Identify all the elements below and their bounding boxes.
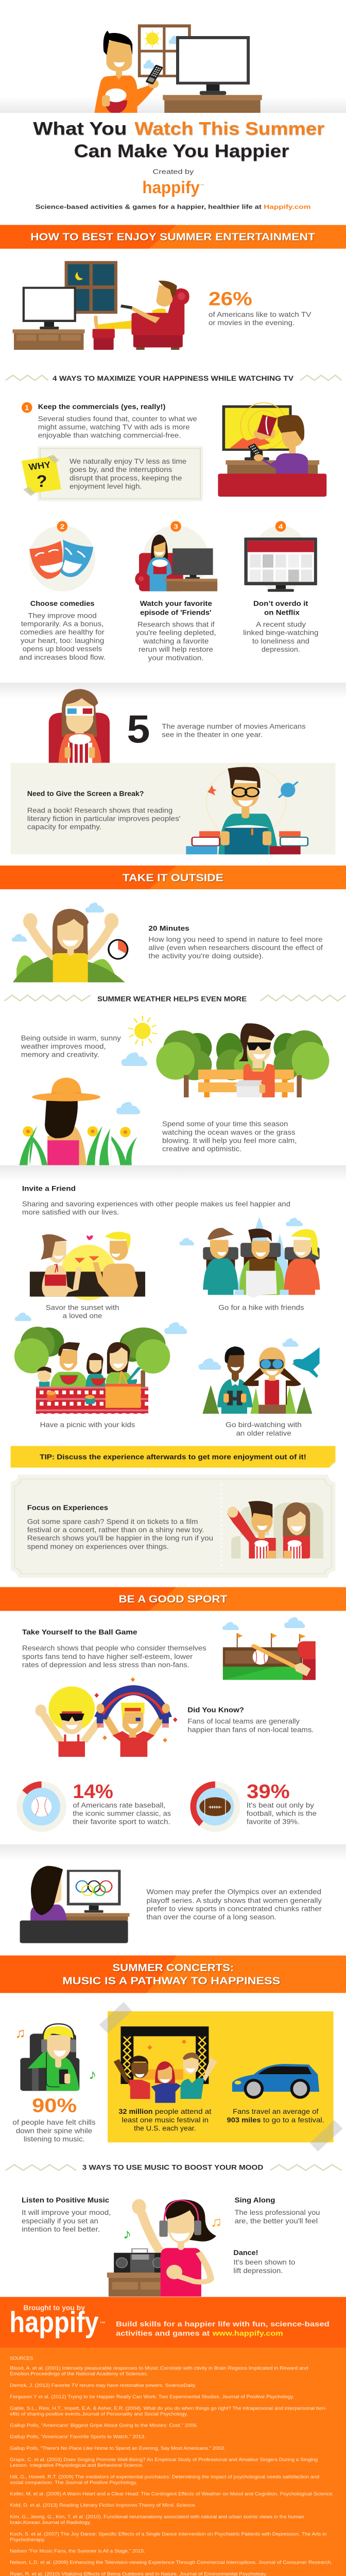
sources list, bottom: Gallup Polls, “There's No Place Like Home to Spend an Evening, Say Most Americans.” 2002. [10, 2446, 226, 2451]
sources list, top: efits of sharing positive events.Journal of Personality and Social Psychology. [10, 2412, 188, 2417]
tip 4: netflix: to loneliness and [252, 638, 309, 645]
illustration: window [138, 24, 191, 77]
stat: 20 minutes: 20 Minutes [148, 925, 189, 933]
callout: why: disrupt that process, keeping the [70, 474, 182, 482]
illustration: TV on console [12, 287, 85, 350]
text: spend time in nature: creative and optimistic. [162, 1145, 241, 1153]
captions: picnic and birdwatching: Go bird-watching with [226, 1421, 302, 1429]
tip 2: comedies: Choose comedies [30, 600, 94, 607]
header panel [0, 24, 346, 211]
section: friends [0, 1121, 346, 1334]
illustration: bird watching [199, 1338, 320, 1414]
section: sport stats [0, 1781, 346, 1993]
captions: picnic and birdwatching: an older relative [236, 1430, 291, 1437]
text: festival stats: to go to a festival. [263, 2116, 324, 2124]
text: women prefer olympics [147, 1888, 322, 1921]
section banner: summer concerts [0, 1956, 346, 1993]
sources list, top: Gallup Polls, “Americans' Biggest Gripe About Going to the Movies: Cost.” 2006. [10, 2423, 198, 2428]
tip 2: comedies: temporarily. As a bonus, [21, 620, 103, 628]
banner: tip [11, 1446, 335, 1468]
stat: 26 percent: 26% [209, 288, 252, 309]
tip 4: netflix: linked binge-watching [243, 629, 318, 637]
panel: focus on experiences ticket: festival or a concert, rather than on a shiny new toy. [27, 1527, 204, 1534]
tagline: Science-based activities & games for a happier, healthier life at [36, 204, 262, 211]
text: festival stats: 32 million [119, 2108, 153, 2115]
caption: go for a hike: Go for a hike with friends [218, 1304, 304, 1312]
text: festival stats: people attend at [155, 2108, 212, 2115]
text: dance: It's been shown to [233, 2259, 296, 2266]
illustration: baseball stadium [222, 1617, 316, 1680]
stat: 26 percent [209, 288, 312, 327]
section: music [6, 2002, 343, 2233]
stat: 39 percent: 39% [247, 1781, 290, 1803]
text: dance: Dance! [233, 2249, 258, 2257]
tagline: Happify.com [264, 204, 310, 211]
section: sport [0, 1587, 346, 1757]
stat: 14 percent [73, 1781, 171, 1826]
text: sing along [235, 2196, 320, 2225]
text: festival stats: the U.S. each year. [134, 2125, 196, 2132]
illustration: man with headphones: ♪ [88, 2066, 97, 2082]
text: listen to positive music: intention to feel better. [22, 2226, 100, 2233]
callout: why [22, 446, 203, 501]
panel: screen break: Need to Give the Screen a Break? [27, 790, 144, 798]
text: sing along: The less professional you [235, 2209, 320, 2216]
panel: focus on experiences ticket [11, 1475, 335, 1578]
sources list, bottom: Psychotherapy. [10, 2537, 45, 2543]
illustration: woman watching commercial on TV [218, 403, 326, 497]
subheading: 3 ways: 3 WAYS TO USE MUSIC TO BOOST YOUR MOOD [82, 2164, 263, 2172]
logo: happify: ™ [200, 184, 204, 187]
icon: sun and cloud [122, 1016, 157, 1066]
callout: why: We naturally enjoy TV less as time [70, 458, 186, 465]
footer: brought to you by: www.happify.com [212, 2330, 283, 2337]
text: ball game: Research shows that people who consider themselves [22, 1645, 206, 1652]
text: ball game: Take Yourself to the Ball Game [22, 1629, 137, 1636]
tip 3: favorite episode [135, 521, 217, 662]
text: spend time in nature: blowing. It will help you feel more calm, [162, 1137, 297, 1145]
text: listen to positive music: Listen to Positive Music [22, 2196, 109, 2204]
stat: 5 movies: The average number of movies Americans [162, 723, 306, 731]
panel: focus on experiences ticket: Focus on Experiences [27, 1504, 108, 1512]
text: dance: lift depression. [233, 2267, 283, 2275]
tip 4: netflix: A recent study [256, 621, 306, 629]
panel: screen break: Read a book! Research shows that reading [27, 807, 172, 815]
text: festival stats: Fans travel an average of [233, 2108, 319, 2115]
tip 4: netflix: Don’t overdo it [253, 600, 308, 607]
text: dance [233, 2249, 296, 2275]
stat: 14 percent: of Americans rate baseball, [73, 1802, 165, 1809]
sources list, top [10, 2356, 327, 2428]
text: sing along: are, the better you'll feel [235, 2217, 318, 2225]
illustration: television [163, 36, 262, 113]
sources list, bottom: Neilsen “For Music Fans, the Summer is All a Stage.” 2015. [10, 2549, 145, 2554]
chart: 39 percent football donut [190, 1782, 240, 1832]
text: festival stats: least one music festival in [122, 2116, 209, 2124]
text: women prefer olympics: Women may prefer the Olympics over an extended [147, 1888, 321, 1896]
callout: why: ? [37, 471, 47, 490]
stat: 5 movies: 5 [127, 707, 150, 751]
callout: why: enjoyment level high. [70, 483, 142, 490]
tip 2: comedies: and increases blood flow. [19, 654, 106, 662]
section banner: be a good sport [0, 1587, 346, 1611]
captions: picnic and birdwatching: Have a picnic with your kids [40, 1421, 135, 1429]
tip 4: netflix: on Netflix [264, 608, 300, 617]
caption: savor the sunset [46, 1304, 119, 1320]
section: TV intro [0, 225, 346, 439]
text: sunny weather: memory and creativity. [21, 1051, 99, 1059]
sources list, top: Derrick, J. (2012) Favorite TV reruns may have restorative powers. ScienceDaily. [10, 2383, 196, 2388]
text: did you know: Did You Know? [187, 1706, 244, 1714]
subheading: 4 ways: 4 WAYS TO MAXIMIZE YOUR HAPPINESS WHILE WATCHING TV [53, 375, 293, 382]
illustration: festival crowd on stage [114, 2026, 217, 2103]
illustration: man reading with books [186, 766, 308, 854]
stat: 39 percent [247, 1781, 317, 1826]
stat: 39 percent: favorite of 39%. [247, 1818, 300, 1826]
stat: 39 percent: football, which is the [247, 1810, 317, 1818]
section banner: how to best enjoy summer entertainment [0, 225, 346, 249]
text: women prefer olympics: prefer to view sports in concentrated chunks rather [147, 1905, 322, 1913]
callout: why: WHY [28, 460, 51, 472]
stat: 20 minutes: the activity you're doing outside). [148, 953, 264, 960]
text: festival stats [119, 2108, 324, 2132]
text: sunny weather: Being outside in warm, sunny [21, 1035, 121, 1042]
illustration: woman on park bench [156, 1023, 329, 1097]
text: listen to positive music [22, 2196, 111, 2233]
sources list, bottom [10, 2434, 334, 2576]
illustration: man with headphones: ♫ [15, 2025, 26, 2041]
sources list, bottom: Gallup Polls, “Americans' Favorite Sports to Watch.” 2013. [10, 2434, 146, 2439]
panel: focus on experiences ticket: Research shows you'll be happier in the long run if you [27, 1535, 213, 1542]
tip 1 text: might assume, watching TV with ads is more [38, 423, 190, 431]
footer: brought to you by [0, 2297, 346, 2348]
sources list, bottom: brain.Korean Journal of Radiology. [10, 2520, 91, 2526]
tip 2: comedies: 2 [60, 523, 64, 531]
text: women prefer olympics: than over the course of a long season. [147, 1913, 276, 1921]
stat: 26 percent: of Americans like to watch TV [209, 311, 312, 318]
footer: brought to you by: Brought to you by [23, 2304, 85, 2312]
sources list, top: Emotion.Proceedings of the National Academy of Sciences. [10, 2371, 148, 2377]
tip 4: netflix: depression. [262, 646, 300, 653]
caption: savor the sunset: a loved one [63, 1312, 102, 1320]
section banner: take it outside [0, 866, 346, 889]
text: invite a friend: Sharing and savoring experiences with other people makes us feel happier and [22, 1200, 290, 1208]
illustration: woman in sun hat with grass [20, 1078, 140, 1165]
tip 1 text: Several studies found that, counter to what we [38, 415, 197, 423]
tip 4: netflix: 4 [279, 523, 283, 531]
illustration: man in armchair [93, 281, 189, 350]
tip 1 text: Keep the commercials (yes, really!) [38, 403, 165, 411]
stat: 14 percent: the iconic summer classic, as [73, 1810, 171, 1818]
section: dance and footer [0, 2199, 346, 2576]
sources list, top: Ferguson Y et al. (2012) Trying to be Happier Really Can Work: Two Experimental Studies. Journal of Positive Psychology. [10, 2394, 294, 2400]
illustration: sports fans [36, 1677, 178, 1757]
section banner: summer concerts: SUMMER CONCERTS: [113, 1962, 234, 1974]
tip 2: comedies [19, 521, 106, 662]
panel: focus on experiences ticket: spend money on experiences over things. [27, 1543, 169, 1551]
text: spend time in nature: Spend some of your time this season [162, 1121, 288, 1128]
panel: music festival [99, 2002, 343, 2151]
chart: 14 percent baseball donut [16, 1782, 66, 1832]
illustration: night window [65, 261, 117, 314]
section banner: take it outside: TAKE IT OUTSIDE [123, 872, 223, 884]
text: spend time in nature: watching the ocean waves or the grass [162, 1129, 296, 1137]
stat: 90 percent: 90% [32, 2094, 77, 2116]
stat: 14 percent: their favorite sport to watch. [73, 1818, 170, 1826]
section banner: be a good sport: BE A GOOD SPORT [119, 1593, 228, 1605]
captions: picnic and birdwatching [40, 1421, 302, 1437]
illustration: woman in nature [12, 903, 128, 982]
tip 1 text [38, 403, 197, 439]
stat: 20 minutes: How long you need to spend in nature to feel more [148, 936, 323, 943]
title [33, 118, 324, 161]
stat: 90 percent: listening to music. [24, 2136, 85, 2143]
text: ball game: sports fans tend to have higher self-esteem, lower [22, 1653, 193, 1660]
panel: screen break [11, 763, 335, 854]
section: outside [5, 903, 346, 1165]
sources list, bottom: social comparison. The Journal of Positive Psychology. [10, 2480, 137, 2485]
text: ball game [22, 1629, 206, 1669]
tip 1 badge: 1 [25, 404, 29, 412]
illustration: man with popcorn [94, 30, 163, 113]
stat: 20 minutes [148, 925, 323, 960]
footer: brought to you by: ™ [99, 2321, 106, 2326]
created by: Created by [153, 168, 194, 176]
illustration: man with headphones [15, 2024, 97, 2091]
tip 1 badge [22, 402, 32, 413]
illustration: woman with 3D glasses [49, 689, 110, 763]
text: invite a friend [22, 1185, 290, 1216]
section: picnic and birds [11, 1327, 335, 1578]
illustration: three hikers [179, 1217, 320, 1298]
stat: 90 percent [12, 2094, 96, 2143]
illustration: dancing woman with boombox: ♪ [123, 2226, 132, 2242]
footer: brought to you by: activities and games at [116, 2330, 210, 2337]
tip 4: netflix [243, 521, 318, 653]
section: ways to watch [19, 403, 326, 662]
subheading: summer weather [5, 995, 346, 1003]
tip 3: favorite episode: watching a favorite [143, 638, 209, 645]
tip 3: favorite episode: Research shows that if [137, 621, 215, 629]
tip 2: comedies: opens up blood vessels [23, 646, 102, 653]
text: listen to positive music: It will improve your mood, [22, 2209, 111, 2216]
tip 2: comedies: your heart, too: laughing [21, 637, 104, 645]
text: did you know: Fans of local teams are generally [187, 1718, 300, 1725]
stat: 90 percent: of people have felt chills [12, 2119, 96, 2126]
section banner: summer concerts: MUSIC IS A PATHWAY TO HAPPINESS [62, 1975, 280, 1987]
sources list, top: SOURCES [10, 2356, 33, 2361]
footer: brought to you by: happify [9, 2306, 99, 2338]
stat: 5 movies [127, 707, 306, 751]
callout: why: goes by, and the interruptions [70, 466, 172, 473]
section: movies and books [0, 683, 346, 889]
icon: clouds [15, 1313, 187, 1334]
title: What You [33, 118, 127, 139]
illustration: family picnic [14, 1327, 170, 1414]
illustration: dancing woman with boombox: ♫ [210, 2214, 222, 2230]
tip 3: favorite episode: episode of 'Friends' [140, 608, 212, 617]
stat: 26 percent: or movies in the evening. [209, 319, 295, 327]
tip 3: favorite episode: Watch your favorite [140, 600, 212, 607]
sources list, bottom: Lesson. Integrative Physiological and Behavioral Science. [10, 2463, 144, 2468]
text: listen to positive music: especially if you set an [22, 2217, 98, 2225]
text: sing along: Sing Along [235, 2196, 275, 2204]
tip 2: comedies: comedies are healthy for [20, 629, 105, 636]
text: did you know [187, 1706, 314, 1734]
stat: 5 movies: see in the theater in one year. [162, 731, 263, 739]
text: sunny weather: weather improves mood, [21, 1043, 106, 1050]
panel: focus on experiences ticket: Got some spare cash? Spend it on tickets to a film [27, 1518, 198, 1526]
text: women prefer olympics: playoff series. A study shows that women generally [147, 1897, 322, 1905]
tip 2: comedies: They improve mood [28, 612, 97, 620]
illustration: blue car [232, 2064, 319, 2099]
illustration: woman watching Olympics [20, 1866, 130, 1943]
banner: tip: TIP: Discuss the experience afterwards to get more enjoyment out of it! [40, 1453, 306, 1461]
stat: 90 percent: down their spine while [16, 2127, 92, 2135]
tip 1 text: enjoyable than watching commercial-free. [38, 432, 181, 439]
tip 3: favorite episode: 3 [174, 523, 178, 531]
text: festival stats: 903 miles [227, 2116, 261, 2124]
panel: screen break: literary fiction in particular improves peoples' [27, 815, 181, 823]
tip 3: favorite episode: you're feeling depleted, [136, 629, 216, 637]
illustration: dancing woman with boombox [107, 2199, 222, 2297]
text: spend time in nature [162, 1121, 297, 1153]
text: did you know: happier than fans of non-local teams. [187, 1726, 314, 1734]
text: ball game: rates of depression and less stress than non-fans. [22, 1662, 189, 1669]
text: invite a friend: more satisfied with our lives. [22, 1209, 119, 1216]
stat: 14 percent: 14% [73, 1781, 113, 1803]
subheading: 3 ways [6, 2164, 341, 2172]
subheading: summer weather: SUMMER WEATHER HELPS EVEN MORE [97, 995, 247, 1003]
tip 3: favorite episode: rerun will help restore [139, 646, 213, 653]
caption: savor the sunset: Savor the sunset with [46, 1304, 119, 1312]
title: Can Make You Happier [74, 141, 289, 161]
stat: 39 percent: It's beat out only by [247, 1802, 314, 1809]
illustration: couple at the movies [227, 1501, 323, 1558]
footer: brought to you by: Build skills for a happier life with fun, science-based [116, 2320, 330, 2328]
tip 3: favorite episode: your motivation. [148, 654, 204, 662]
logo: happify: happify [142, 178, 200, 197]
text: sunny weather [21, 1035, 121, 1059]
panel: screen break: capacity for empathy. [27, 823, 101, 831]
illustration: couple at sunset [30, 1232, 145, 1300]
text: invite a friend: Invite a Friend [22, 1185, 76, 1193]
sources list, bottom: Kidd, D. et al. (2013) Reading Literary Fiction Improves Theory of Mind. Science. [10, 2503, 196, 2508]
